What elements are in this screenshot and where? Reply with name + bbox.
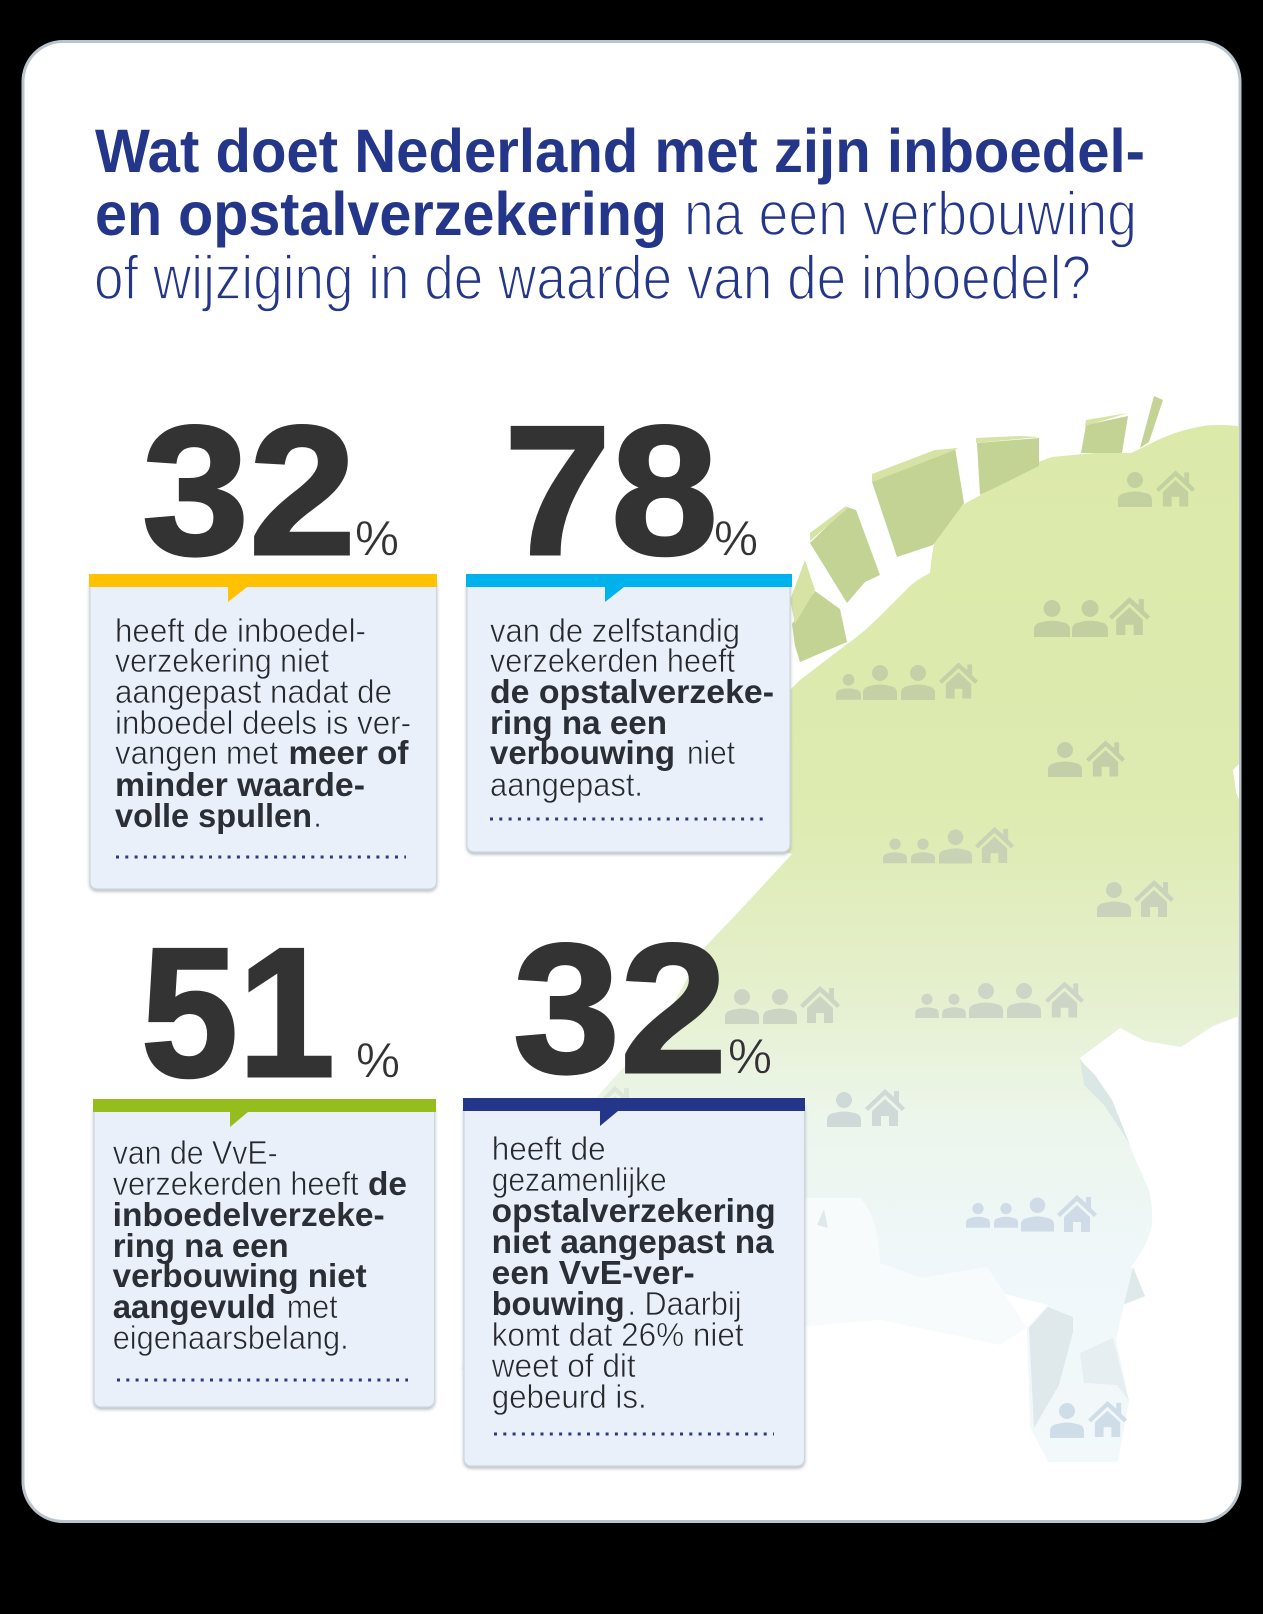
card text: van de VvE- [113, 1134, 278, 1171]
icon group Flevoland [883, 827, 1014, 863]
card text: . [313, 797, 322, 834]
card text: aangevuld [113, 1288, 276, 1325]
southern province patches [817, 1060, 1145, 1428]
green bar [93, 1099, 436, 1127]
faint southern fade [460, 1198, 1027, 1370]
white notch on the east border [1233, 764, 1239, 800]
icon group Limburg [1050, 1401, 1127, 1438]
card text: ring na een [490, 704, 667, 741]
number 78: 78 [504, 387, 718, 593]
stat: 32 percent VvE opstal [463, 905, 805, 1466]
icon group Overijssel [1048, 740, 1125, 777]
card text [113, 1134, 407, 1356]
number 32: 32 [513, 905, 727, 1111]
percent sign: % [355, 512, 399, 566]
card text: met [287, 1288, 338, 1325]
card text: gebeurd is. [492, 1378, 647, 1415]
percent sign: % [728, 1030, 772, 1084]
card text: aangepast. [490, 766, 643, 803]
card [90, 578, 436, 889]
navy bar [463, 1098, 805, 1126]
card text: inboedel deels is ver- [115, 704, 411, 741]
stat: 78 percent opstal [466, 387, 792, 852]
icon group Zuid-Holland [827, 1089, 905, 1127]
heading line 2 light: na een verbouwing [684, 180, 1137, 249]
card text: komt dat 26% niet [492, 1316, 744, 1353]
card text: ring na een [113, 1227, 289, 1264]
icon group Drenthe [1034, 597, 1150, 637]
heading line 3: of wijziging in de waarde van de inboedel? [94, 244, 1091, 313]
stat: 32 percent inboedel [89, 387, 437, 889]
map of the Netherlands [460, 396, 1239, 1462]
card text: verbouwing [490, 734, 675, 771]
card text [115, 612, 411, 834]
card text: heeft de [492, 1130, 606, 1167]
people and house icons [595, 470, 1195, 1438]
card [94, 1103, 434, 1407]
icon group Noord-Brabant [966, 1195, 1097, 1232]
icon group Gelderland east [1097, 880, 1174, 917]
percent sign: % [356, 1034, 400, 1088]
card text: verzekering niet [115, 642, 329, 679]
icon group Friesland [836, 662, 978, 700]
island five [1081, 413, 1128, 453]
card text: eigenaarsbelang. [113, 1319, 349, 1356]
card text: verzekerden heeft [490, 642, 735, 679]
island one [790, 560, 847, 662]
card text: verzekerden heeft [113, 1165, 359, 1202]
card text: gezamenlijke [492, 1161, 667, 1198]
card text: vangen met [115, 734, 278, 771]
blue bar [466, 574, 792, 602]
card text [491, 1130, 776, 1415]
stat: 51 percent VvE inboedel [93, 909, 436, 1407]
island four [976, 436, 1040, 495]
card text: minder waarde- [115, 766, 365, 803]
icon group Groningen [1118, 470, 1195, 507]
card text: heeft de inboedel- [115, 612, 366, 649]
card text: . Daarbij [628, 1285, 742, 1322]
card text: niet aangepast na [492, 1223, 774, 1260]
number 32: 32 [142, 387, 356, 593]
card text: de opstalverzeke- [490, 673, 774, 710]
island six [1140, 396, 1163, 448]
card [467, 578, 790, 852]
card text: aangepast nadat de [115, 673, 392, 710]
card text: volle spullen [115, 797, 312, 834]
card [464, 1102, 804, 1466]
card text: niet [687, 734, 735, 771]
card text: verbouwing niet [113, 1257, 367, 1294]
icon group Utrecht [725, 986, 840, 1024]
number 51: 51 [141, 909, 335, 1115]
card text: bouwing [492, 1285, 625, 1322]
card text [490, 612, 774, 803]
heading line 2 bold: en opstalverzekering [95, 180, 667, 248]
icon group behind card [595, 1086, 635, 1123]
island three [872, 448, 964, 557]
island two [810, 506, 880, 603]
percent sign: % [714, 512, 758, 566]
card text: de [368, 1165, 407, 1202]
heading line 1: Wat doet Nederland met zijn inboedel- [95, 117, 1145, 185]
card text: van de zelfstandig [490, 612, 740, 649]
card text: meer of [288, 734, 410, 771]
yellow bar [89, 574, 437, 602]
icon group Gelderland [915, 981, 1084, 1018]
mainland [540, 425, 1239, 1462]
card text: opstalverzekering [492, 1192, 776, 1229]
heading [94, 117, 1145, 313]
card text: weet of dit [491, 1347, 636, 1384]
card text: een VvE-ver- [492, 1254, 695, 1291]
card text: inboedelverzeke- [113, 1196, 385, 1233]
